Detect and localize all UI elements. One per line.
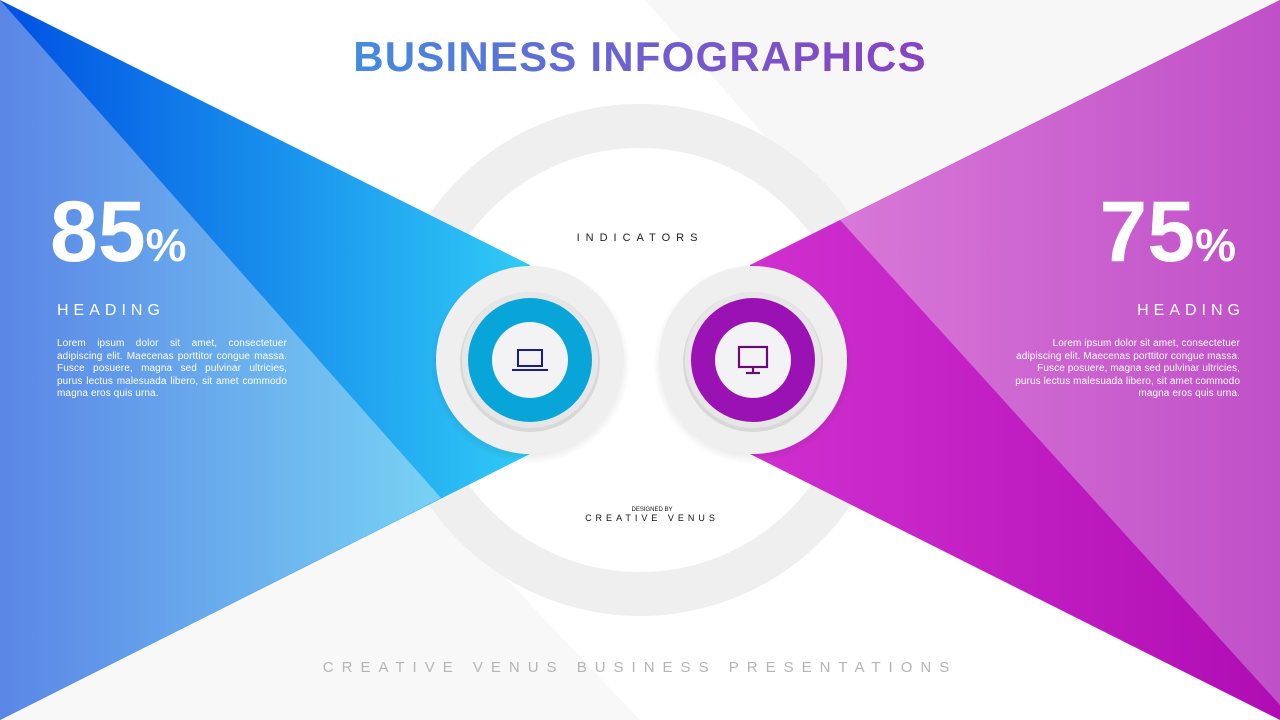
title: BUSINESS INFOGRAPHICS: [353, 33, 927, 80]
left indicator circle: [434, 266, 626, 460]
designed by credit: DESIGNED BY: [631, 507, 672, 513]
icon: laptop: [512, 350, 548, 370]
left percentage: 85%: [50, 184, 187, 280]
left stat block: [50, 184, 287, 399]
right text: Lorem ipsum dolor sit amet, consectetuer adipiscing elit. Maecenas porttitor congue massa. Fusce posuere, magna sed pulvinar ultricies, purus lectus malesuada libero, sit amet commodo magna eros quis urna.: [1015, 338, 1240, 399]
right heading: HEADING: [1137, 302, 1245, 319]
gray ring: [406, 126, 874, 594]
designed by credit: CREATIVE VENUS: [585, 513, 719, 523]
left blue shape: [0, 0, 530, 720]
right percentage: 75%: [1099, 184, 1236, 280]
right magenta shape: [750, 0, 1280, 720]
right indicator circle: [658, 266, 848, 460]
designed by credit: [585, 506, 719, 523]
right stat block: [1015, 184, 1245, 399]
left heading: HEADING: [57, 302, 165, 319]
icon: monitor: [739, 347, 767, 373]
left text: Lorem ipsum dolor sit amet, consectetuer adipiscing elit. Maecenas porttitor congue massa. Fusce posuere, magna sed pulvinar ultricies, purus lectus malesuada libero, sit amet commodo magna eros quis urna.: [57, 338, 287, 399]
footer: CREATIVE VENUS BUSINESS PRESENTATIONS: [323, 659, 957, 676]
indicators label: INDICATORS: [577, 232, 703, 244]
